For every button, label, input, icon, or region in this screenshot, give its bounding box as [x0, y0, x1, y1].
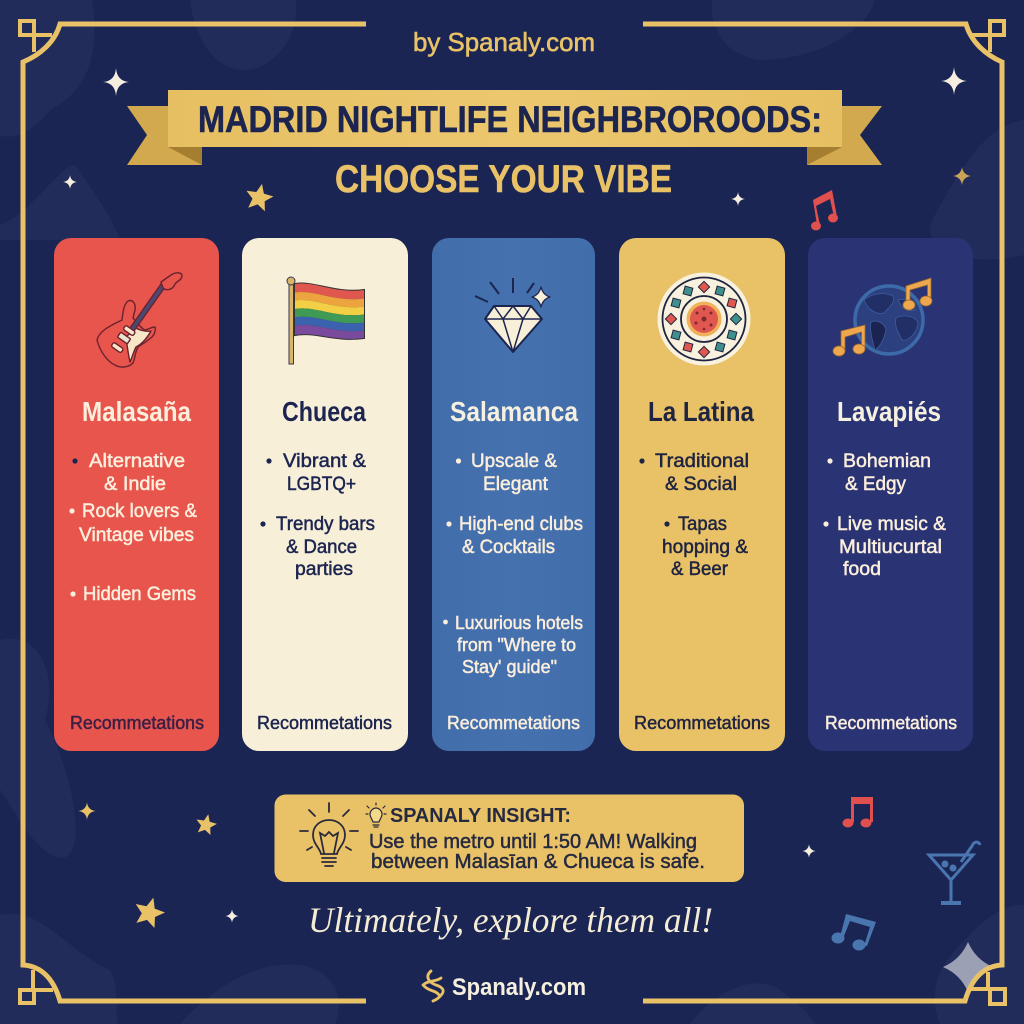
feature list: Vintage vibes: [79, 524, 194, 546]
feature list: & Cocktails: [462, 536, 555, 558]
icon: globe with music notes: [833, 278, 932, 356]
feature list: [443, 450, 583, 677]
feature list: Luxurious hotels: [455, 613, 583, 633]
card: Lavapiés: [808, 238, 973, 751]
card: Salamanca: [432, 238, 595, 751]
feature list: [69, 450, 197, 605]
feature list: Alternative: [89, 450, 185, 472]
brand name: Spanaly.com: [452, 974, 586, 1001]
icon: tapas plate: [658, 272, 750, 366]
feature list: LGBTQ+: [287, 473, 356, 495]
insight callout: between Malasīan & Chueca is safe.: [371, 850, 705, 873]
icon: swirl logo: [423, 971, 443, 1001]
feature list: Traditional: [655, 450, 749, 472]
heading: Salamanca: [450, 396, 578, 427]
insight callout: [274, 794, 744, 882]
icon: red music note top: [811, 190, 838, 230]
feature list: Stay' guide": [462, 657, 557, 677]
feature list: Hidden Gems: [83, 583, 196, 605]
insight heading: SPANALY INSIGHT:: [390, 805, 571, 827]
feature list: Multiucurtal: [839, 536, 942, 558]
feature list: food: [843, 558, 881, 580]
recommendation label: Recommetations: [825, 712, 957, 733]
recommendation label: Recommetations: [634, 712, 770, 733]
heading: La Latina: [648, 396, 754, 427]
card: Chueca: [242, 238, 408, 751]
feature list: & Social: [665, 473, 737, 495]
feature list: Rock lovers &: [82, 500, 197, 522]
title banner: [127, 90, 882, 165]
feature list: Elegant: [483, 473, 549, 495]
feature list: Bohemian: [843, 450, 931, 472]
title line one: MADRID NIGHTLIFE NEIGHBROROODS:: [198, 99, 822, 140]
heading: Chueca: [282, 396, 366, 427]
feature list: Live music &: [837, 513, 946, 535]
icon: guitar: [97, 273, 182, 367]
heading: Malasaña: [82, 396, 191, 427]
feature list: parties: [295, 558, 353, 580]
recommendation label: Recommetations: [447, 712, 580, 733]
footer brand: [423, 971, 586, 1001]
feature list: Tapas: [678, 513, 727, 535]
decorative stars and sparkles: [63, 67, 971, 930]
feature list: hopping &: [662, 536, 748, 558]
feature list: [823, 450, 946, 580]
feature list: Upscale &: [471, 450, 557, 472]
icon: blue music note: [832, 914, 876, 950]
closing tagline: Ultimately, explore them all!: [308, 900, 713, 940]
icon: martini glass: [929, 842, 980, 903]
decorative large grey sparkle: [943, 942, 993, 992]
title line two: CHOOSE YOUR VIBE: [335, 158, 672, 201]
card: Malasaña: [54, 238, 219, 751]
card: La Latina: [619, 238, 785, 751]
recommendation label: Recommetations: [70, 712, 204, 733]
icon: red music note bottom: [842, 797, 873, 828]
icon: small light bulb: [366, 803, 386, 827]
icon: rainbow flag: [287, 277, 364, 364]
feature list: High-end clubs: [459, 513, 583, 535]
feature list: from "Where to: [457, 635, 576, 655]
recommendation label: Recommetations: [257, 712, 392, 733]
feature list: & Beer: [671, 558, 728, 580]
icon: large light bulb: [300, 803, 358, 866]
feature list: [639, 450, 749, 580]
feature list: Trendy bars: [276, 513, 375, 535]
feature list: [260, 450, 375, 580]
feature list: & Dance: [286, 536, 357, 558]
feature list: & Indie: [104, 473, 166, 495]
feature list: & Edgy: [845, 473, 906, 495]
icon: diamond: [475, 278, 550, 352]
heading: Lavapiés: [837, 396, 941, 427]
byline: by Spanaly.com: [413, 27, 595, 57]
insight body: Use the metro until 1:50 AM! Walking: [369, 830, 697, 853]
feature list: Vibrant &: [283, 450, 366, 472]
